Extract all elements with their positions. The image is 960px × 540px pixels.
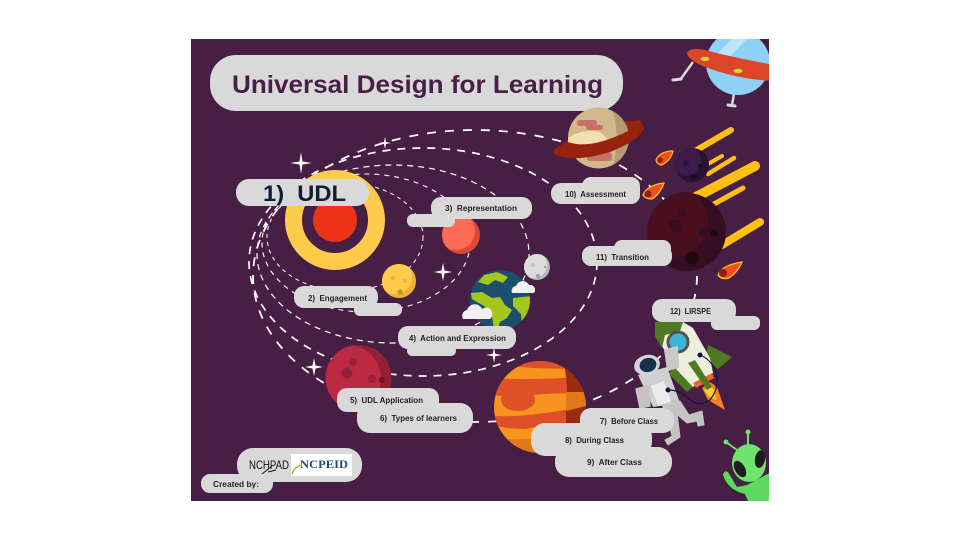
label: 6) Types of learners: [357, 403, 473, 433]
icon: jupiter: [494, 361, 586, 453]
label: 10) Assessment: [551, 177, 640, 204]
label: 6) Types of learners: 6) Types of learners: [380, 414, 458, 423]
icon: crimson planet: [326, 345, 392, 404]
logo: NCHPAD: NCHPAD: [249, 458, 289, 472]
icon: moon: [524, 254, 550, 280]
label: 9) After Class: [555, 447, 672, 477]
label: 5) UDL Application: [337, 388, 439, 412]
label: 10) Assessment: 10) Assessment: [565, 190, 626, 199]
icon: ufo: [672, 39, 769, 108]
icon: earth: [470, 270, 530, 328]
icon: large meteor: [647, 192, 726, 271]
icon: red planet: [442, 219, 480, 254]
icon: comets: [643, 151, 742, 279]
label: 12) LIRSPE: 12) LIRSPE: [670, 307, 712, 316]
icon: small meteor: [675, 148, 709, 182]
label: 1) UDL: 1) UDL: [263, 181, 346, 206]
icon: clouds: [462, 281, 535, 319]
label: 2) Engagement: [294, 286, 402, 316]
icon: alien: [723, 430, 769, 501]
label: 11) Transition: 11) Transition: [596, 253, 649, 262]
label: Created by: Created by:: [213, 480, 259, 489]
orbit paths: [249, 130, 697, 422]
label: 11) Transition: [582, 240, 672, 266]
label: Created by: [201, 474, 273, 493]
label: 4) Action and Expression: 4) Action and Expression: [409, 334, 506, 343]
panel: logos: NCPEID: [300, 459, 348, 471]
label: 1) UDL: [236, 179, 369, 206]
background panel: [191, 39, 769, 501]
label: 8) During Class: 8) During Class: [565, 436, 625, 445]
icon: meteor streaks: [694, 130, 760, 245]
label: 12) LIRSPE: [652, 299, 760, 330]
label: 7) Before Class: 7) Before Class: [600, 417, 659, 426]
icon: rocket: [655, 322, 732, 410]
icon: yellow planet: [382, 264, 416, 298]
icon: saturn: [553, 105, 644, 172]
title: Universal Design for Learning: [232, 71, 603, 99]
label: 2) Engagement: 2) Engagement: [308, 294, 367, 303]
label: 5) UDL Application: 5) UDL Application: [350, 396, 423, 405]
panel: logos: [237, 448, 362, 482]
label: 3) Representation: [407, 197, 532, 227]
label: 7) Before Class: [580, 408, 674, 433]
label: 3) Representation: 3) Representation: [445, 204, 517, 213]
title: [210, 55, 623, 111]
icon: sparkle stars: [290, 137, 502, 376]
icon: sun: [294, 178, 376, 262]
label: 9) After Class: 9) After Class: [587, 458, 643, 467]
label: 4) Action and Expression: [398, 326, 516, 356]
icon: astronaut: [632, 347, 717, 445]
label: 8) During Class: [531, 423, 652, 456]
